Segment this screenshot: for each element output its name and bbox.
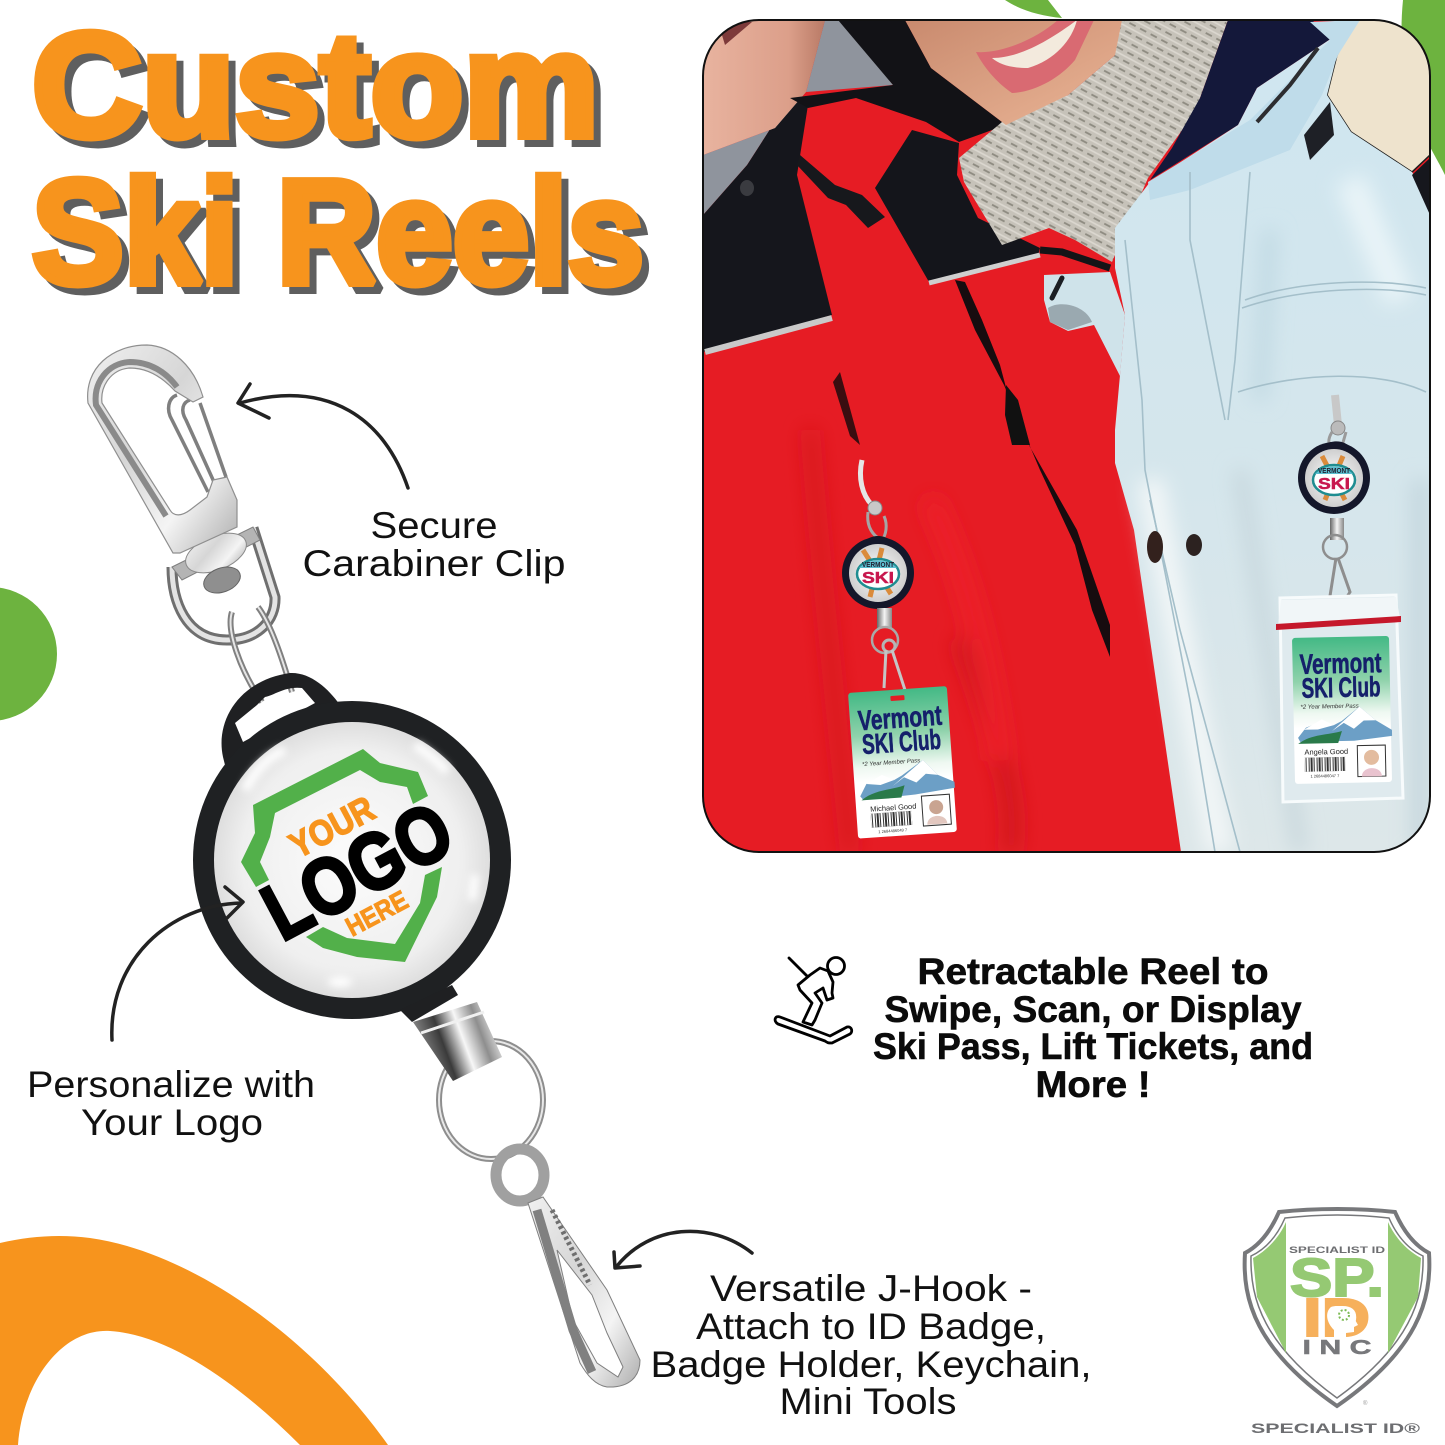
logo: specialist id shield: SPECIALIST ID® [1251, 1420, 1421, 1436]
metal cylinder [413, 1002, 502, 1081]
shield outline [241, 749, 442, 962]
reel on red jacket: SKI [862, 570, 894, 587]
skin left [703, 20, 825, 155]
jacket shading [1150, 180, 1420, 852]
logo text: YOUR [283, 788, 381, 866]
dark sleeve right [1412, 159, 1429, 213]
logo: specialist id shield: ID [1303, 1288, 1370, 1348]
decorative orange arch bottom left [0, 1236, 388, 1445]
hook [1330, 558, 1350, 608]
gate wires [169, 395, 226, 492]
fold sliver [833, 372, 860, 445]
id card on red jacket: SKI Club [861, 724, 942, 760]
callout: retractable reel [873, 951, 1313, 1105]
grey collar lower [703, 92, 806, 215]
title: Custom [39, 10, 606, 175]
callout: retractable reel: Retractable Reel to [918, 951, 1268, 992]
clear badge holder [1276, 595, 1403, 802]
logo: specialist id shield: ® [1363, 1400, 1368, 1407]
cream glove [1327, 20, 1430, 172]
knit scarf [959, 20, 1228, 262]
left collar button [740, 180, 754, 196]
id card in holder: 1 2684486047 7 [1310, 773, 1340, 779]
panel: ski photo [703, 20, 1430, 852]
j-hook body [528, 1197, 640, 1387]
id card on red jacket: *2 Year Member Pass [862, 758, 920, 768]
navy collar [1150, 20, 1332, 180]
title: Ski Reels [32, 150, 644, 315]
cylinder band [421, 1012, 484, 1033]
label: logo: Your Logo [81, 1102, 263, 1143]
clip [1335, 395, 1338, 425]
shield outer [1245, 1209, 1429, 1406]
label: logo [27, 1064, 315, 1143]
cuff underside [1048, 304, 1092, 330]
badge ellipse [1313, 465, 1355, 495]
hook loop [496, 1149, 544, 1201]
zipper sliver [955, 280, 1110, 657]
lower hardware: cylinder, ring, j-hook [413, 1002, 640, 1387]
id card in holder: Angela Good [1304, 747, 1348, 757]
fur trim [1257, 48, 1318, 122]
reel on light jacket: SKI [1318, 476, 1350, 493]
label: j-hook: Versatile J-Hook - [710, 1268, 1032, 1309]
id card on red jacket [848, 686, 958, 839]
gate texture [552, 1210, 590, 1285]
logo text: LOGO [248, 785, 467, 957]
callout: retractable reel: Ski Pass, Lift Tickets, and [873, 1026, 1313, 1067]
swivel bracket [172, 528, 275, 640]
lug [1318, 441, 1352, 455]
teeth [992, 20, 1077, 68]
reel body [1298, 442, 1370, 514]
decorative green half circle left [0, 587, 57, 721]
shield green left [1253, 1222, 1286, 1353]
label: j-hook: Attach to ID Badge, [696, 1306, 1046, 1347]
lug [222, 673, 340, 765]
cuff fur [1040, 250, 1110, 268]
id card on red jacket: Michael Good [870, 802, 917, 814]
logo: specialist id shield: SPECIALIST ID [1289, 1245, 1385, 1256]
inner collar light [1148, 20, 1360, 200]
face [905, 20, 1122, 125]
reel rim [193, 701, 511, 1019]
carabiner clip [88, 345, 292, 702]
logo: specialist id shield: I N C [1302, 1337, 1372, 1359]
id card in holder: Vermont [1299, 647, 1382, 680]
buttons [1147, 531, 1163, 563]
jacket cuff over red [1044, 272, 1125, 376]
black fur collar [790, 20, 1006, 142]
dome glints [245, 745, 475, 987]
red jacket base [703, 20, 1430, 852]
title: Ski Reels [39, 157, 651, 322]
logo: specialist id shield [1245, 1209, 1429, 1436]
reel on red jacket: VERMONT [862, 562, 895, 569]
hook [884, 650, 905, 694]
label: carabiner: Carabiner Clip [302, 543, 566, 584]
hook shaft shading [537, 1210, 592, 1372]
carabiner inner rim [96, 362, 177, 516]
mouth left [722, 22, 752, 45]
reel on red jacket [842, 460, 914, 694]
ring [872, 627, 898, 653]
label: carabiner [302, 505, 566, 584]
reflective stripe left [705, 318, 832, 352]
swivel band [172, 527, 260, 580]
lug [868, 536, 889, 539]
split ring [439, 1041, 543, 1159]
skis [863, 548, 891, 597]
split ring [231, 607, 292, 702]
red jacket folds [956, 646, 1022, 849]
arrow to carabiner [238, 384, 408, 488]
icon: skier [775, 958, 852, 1043]
reel on light jacket [1298, 395, 1370, 608]
hook loop [883, 640, 895, 652]
callout: retractable reel: More ! [1036, 1064, 1150, 1105]
label: j-hook: Mini Tools [780, 1381, 956, 1422]
arrow to logo [112, 887, 243, 1040]
label: logo: Personalize with [27, 1064, 315, 1105]
carabiner body [88, 345, 237, 553]
clip [860, 460, 872, 505]
reel on light jacket: VERMONT [1318, 468, 1351, 475]
arrow to j-hook [614, 1231, 752, 1268]
shield inner line [1251, 1215, 1423, 1398]
title [32, 3, 651, 322]
logo: specialist id shield: SP. [1290, 1248, 1384, 1308]
cylinder [1330, 518, 1344, 540]
red zip strip [1276, 616, 1401, 630]
label: carabiner: Secure [370, 505, 498, 546]
swivel dome [180, 525, 252, 581]
reel body [842, 537, 914, 609]
connector collar [400, 985, 458, 1022]
retractable reel [193, 673, 511, 1022]
logo text: HERE [341, 885, 413, 942]
zip pull left [797, 155, 885, 228]
black jacket centre [875, 130, 1040, 282]
id card on red jacket: 1 2684486049 7 [878, 827, 908, 834]
black yoke left [703, 98, 832, 352]
grey collar upper [806, 20, 893, 92]
reel dome [214, 722, 490, 998]
light blue jacket [1115, 38, 1430, 852]
reflective stripe centre [929, 255, 1040, 283]
label: j-hook: Badge Holder, Keychain, [650, 1344, 1092, 1385]
cuff slot [1052, 278, 1062, 298]
decorative green shape top [1005, 0, 1062, 18]
collar strap gap [1304, 102, 1334, 160]
zipper pull [1005, 385, 1030, 445]
id card in holder [1292, 636, 1393, 784]
cylinder [877, 608, 892, 628]
ring [1323, 535, 1347, 559]
shield green right [1388, 1222, 1421, 1353]
decorative green shape top right [1402, 0, 1445, 175]
swivel ball [200, 562, 244, 598]
skis [1322, 456, 1345, 500]
photo border [703, 20, 1430, 852]
holder top strip [1278, 597, 1400, 626]
callout: retractable reel: Swipe, Scan, or Display [884, 989, 1302, 1030]
id card in holder: *2 Year Member Pass [1300, 704, 1359, 711]
jacket stitching [1125, 172, 1426, 852]
badge ellipse [857, 559, 899, 589]
lips [976, 20, 1094, 93]
title: Custom [32, 3, 599, 168]
id card on red jacket: Vermont [857, 700, 943, 736]
id card in holder: SKI Club [1301, 671, 1381, 704]
label: j-hook [650, 1268, 1092, 1422]
head icon [1327, 1306, 1358, 1337]
